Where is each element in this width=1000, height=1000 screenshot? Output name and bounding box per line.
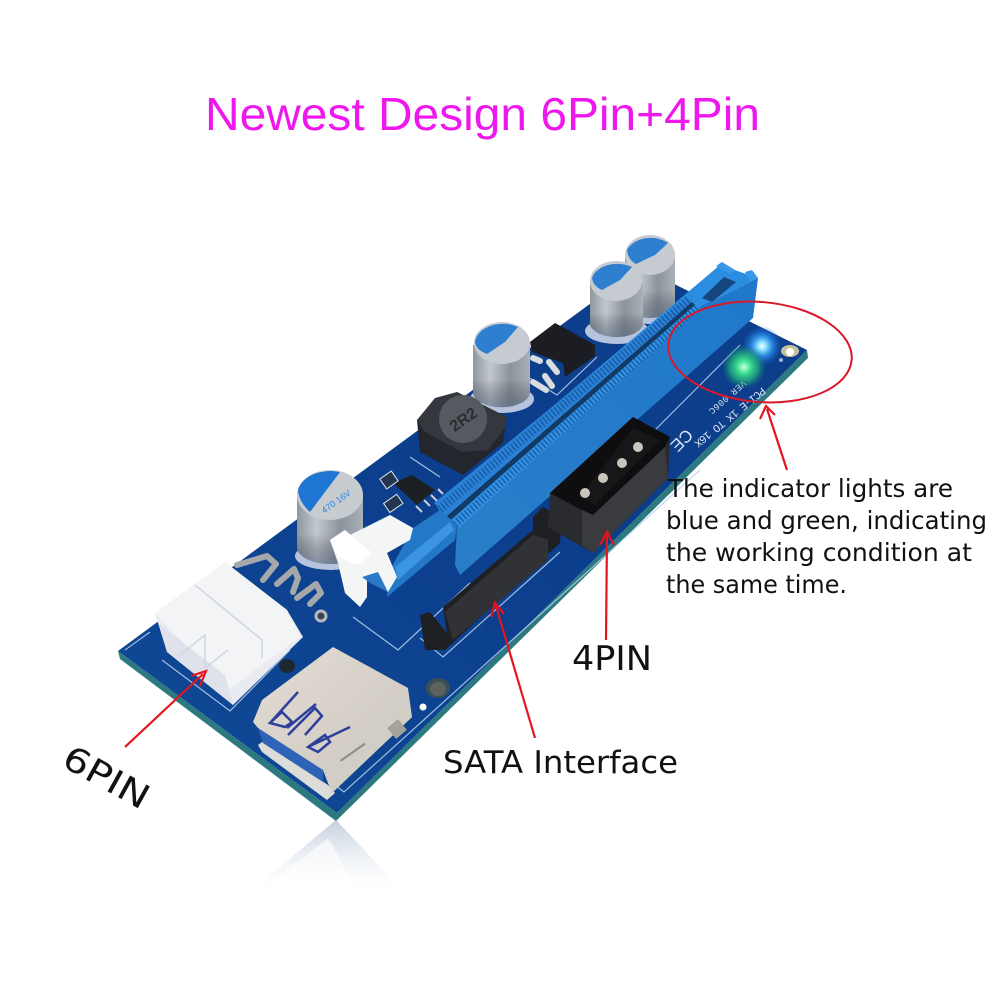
callout: indicator lights: the working condition at <box>666 538 972 567</box>
slot front wall <box>455 278 758 575</box>
callout: indicator lights: blue and green, indicating <box>666 506 987 535</box>
USB blue logo <box>270 692 350 752</box>
Molex pins <box>580 442 643 498</box>
Molex 4-pin connector <box>548 417 670 553</box>
callout: indicator lights: The indicator lights are <box>667 474 953 503</box>
capacitor far right <box>620 235 680 324</box>
6-pin rear solder pins <box>237 556 326 621</box>
mounting holes <box>279 345 799 710</box>
USB 3.0 port <box>253 647 412 800</box>
inductor marking: 2R2 <box>447 405 481 436</box>
board silkscreen lettering: VER 006C <box>706 378 748 416</box>
label: 6PIN: 6PIN <box>56 738 156 818</box>
capacitor marking: 470 16V <box>320 488 353 515</box>
slot top surface <box>436 265 758 525</box>
LEDs <box>722 326 782 389</box>
blue PCIe x16 slot <box>387 262 758 597</box>
board silkscreen lettering <box>666 378 767 455</box>
indicator circle <box>664 294 856 410</box>
riser circuit board <box>118 267 808 821</box>
capacitor right <box>585 261 649 344</box>
retention rail <box>387 510 457 597</box>
inductor <box>417 392 507 475</box>
arrow: indicator lights <box>760 406 787 470</box>
label: 4PIN: 4PIN <box>572 639 652 679</box>
reflection under board <box>257 820 398 886</box>
silkscreen outlines <box>125 345 740 792</box>
IC chip <box>380 471 443 513</box>
arrow: 6PIN <box>125 671 206 747</box>
MOSFET <box>530 323 595 390</box>
capacitor centre <box>470 322 534 413</box>
arrow: 4PIN <box>600 532 614 640</box>
arrow: SATA <box>491 603 535 738</box>
board silkscreen lettering: PCI-E 1X TO 16X <box>691 384 767 449</box>
slot tooth rows <box>434 297 700 528</box>
callout: indicator lights <box>666 474 987 599</box>
title: Newest Design 6Pin+4Pin <box>205 88 760 140</box>
callout: indicator lights: the same time. <box>666 570 847 599</box>
white latch <box>330 515 413 607</box>
label: SATA Interface: SATA Interface <box>443 745 678 781</box>
6-pin white connector <box>155 562 303 705</box>
SATA connector <box>420 507 562 650</box>
board silkscreen lettering: CE <box>666 425 697 455</box>
capacitor left <box>295 470 367 570</box>
